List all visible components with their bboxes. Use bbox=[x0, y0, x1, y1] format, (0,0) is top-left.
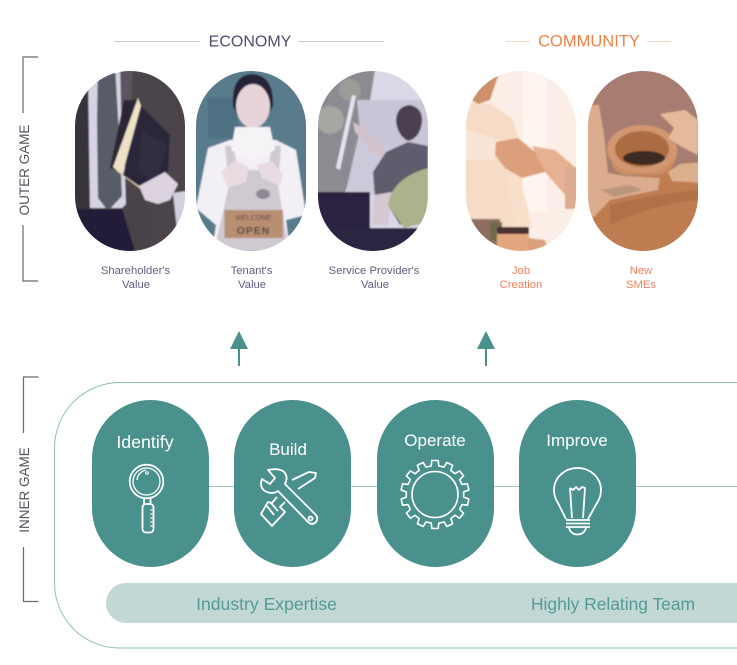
caption: shareholder's value: Value bbox=[122, 279, 150, 291]
icon: gear bbox=[400, 460, 470, 529]
bar: shared capabilities: Industry Expertise bbox=[196, 594, 337, 614]
label: outer game bracket bbox=[17, 57, 38, 281]
bar: shared capabilities: Highly Relating Team bbox=[531, 594, 695, 614]
photo: tenant bbox=[196, 71, 306, 251]
label: inner game bracket: INNER GAME bbox=[17, 447, 32, 533]
connector line bbox=[150, 486, 737, 488]
bar: shared capabilities bbox=[106, 583, 737, 623]
step: build bbox=[234, 400, 351, 567]
step: identify bbox=[92, 400, 209, 567]
caption: job creation: Job bbox=[512, 265, 530, 277]
photo: handshake bbox=[466, 71, 576, 251]
heading: community: COMMUNITY bbox=[538, 32, 640, 50]
arrow: right up bbox=[477, 331, 495, 366]
caption: service provider's value: Value bbox=[361, 279, 389, 291]
step: operate bbox=[377, 400, 494, 567]
caption: shareholder's value: Shareholder's bbox=[101, 265, 171, 277]
caption: new smes: SMEs bbox=[626, 279, 656, 291]
photo: service provider bbox=[318, 71, 428, 251]
caption: service provider's value: Service Provider's bbox=[329, 265, 420, 277]
icon: magnifying glass bbox=[130, 465, 163, 532]
photo: tenant: OPEN bbox=[237, 225, 270, 237]
step: identify: Identify bbox=[116, 432, 174, 452]
heading: economy: ECONOMY bbox=[209, 34, 292, 50]
caption: job creation: Creation bbox=[500, 279, 542, 291]
step: operate: Operate bbox=[404, 431, 466, 450]
label: outer game bracket: OUTER GAME bbox=[17, 125, 32, 215]
step: improve bbox=[519, 400, 636, 567]
panel: inner game container bbox=[54, 382, 737, 648]
arrow: left up bbox=[230, 331, 248, 366]
photo: tenant: WELCOME bbox=[235, 215, 272, 222]
icon: wrench and screwdriver bbox=[261, 469, 317, 526]
caption: tenant's value: Value bbox=[238, 279, 266, 291]
step: build: Build bbox=[269, 440, 307, 459]
label: inner game bracket bbox=[17, 377, 38, 602]
photo: pottery bbox=[588, 71, 698, 251]
icon: light bulb bbox=[554, 468, 601, 534]
photo: shareholder bbox=[75, 71, 185, 251]
step: improve: Improve bbox=[546, 431, 608, 450]
caption: tenant's value: Tenant's bbox=[231, 265, 273, 277]
caption: new smes: New bbox=[630, 265, 653, 277]
